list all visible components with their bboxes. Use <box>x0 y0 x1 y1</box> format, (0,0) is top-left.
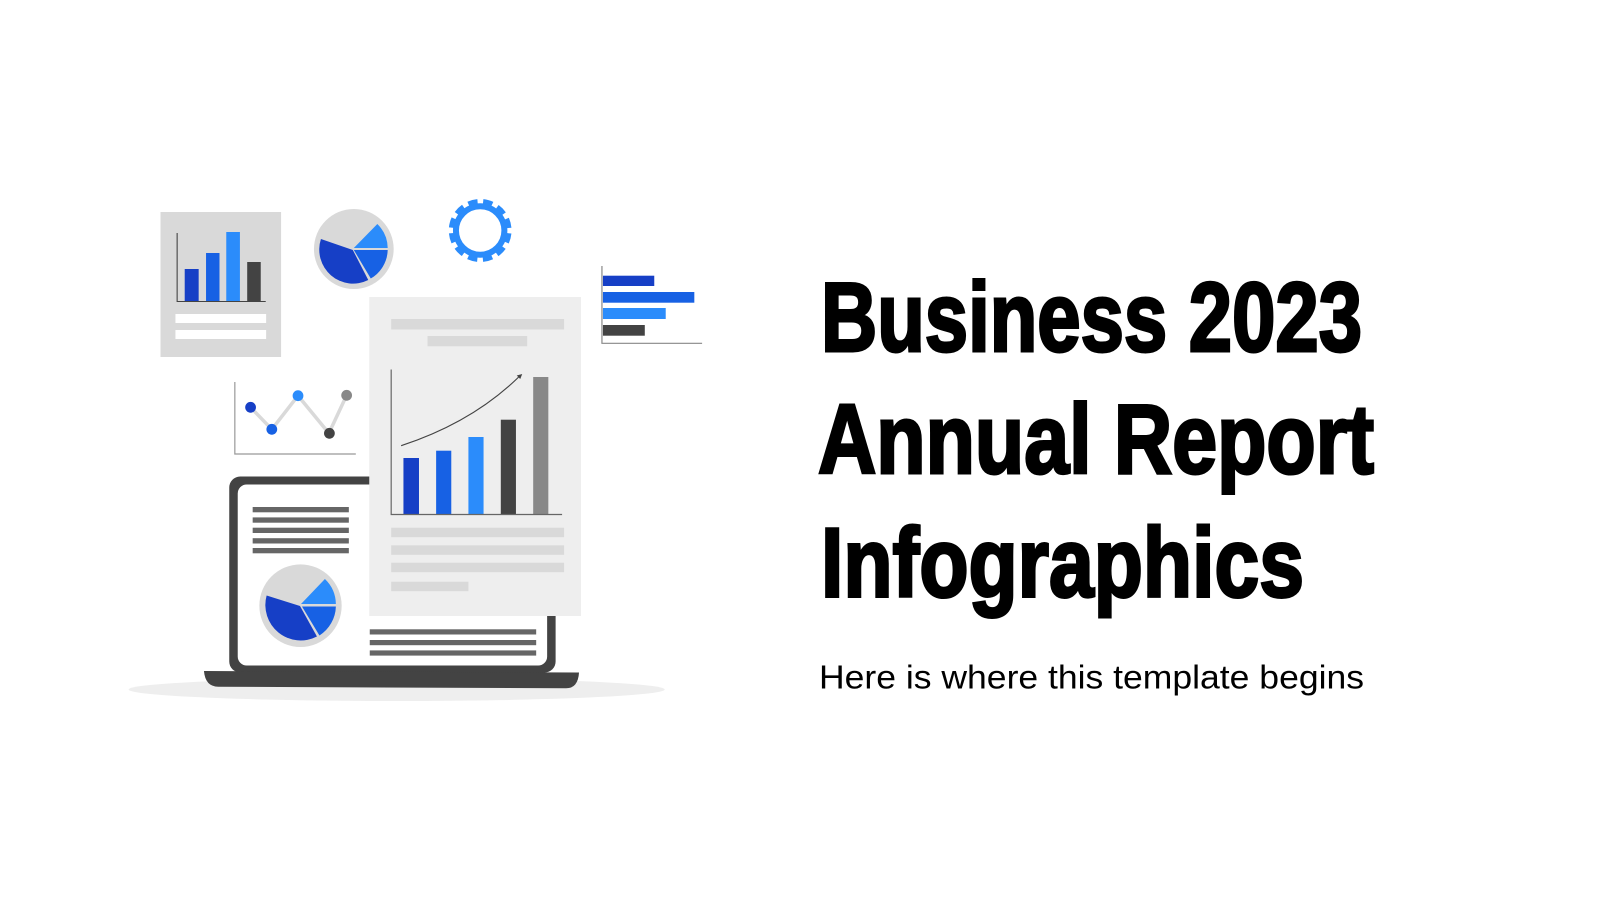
title: Annual Report <box>818 384 1374 494</box>
title: Business 2023 <box>821 262 1362 372</box>
laptop pie chart <box>259 564 342 647</box>
subtitle: Here is where this template begins <box>819 660 1364 696</box>
horizontal bar chart <box>602 266 702 343</box>
panel: report document <box>369 297 581 616</box>
icon: gear <box>451 202 509 260</box>
illustration: business report <box>129 202 702 701</box>
laptop text lines left <box>253 507 349 553</box>
panel: gray report card <box>160 212 281 357</box>
pie chart <box>314 209 394 289</box>
line chart <box>235 382 356 454</box>
icon: laptop <box>204 476 579 688</box>
title <box>818 262 1374 618</box>
arrow: growth curve <box>401 374 522 446</box>
report bar chart <box>391 370 562 514</box>
title: Infographics <box>821 508 1304 618</box>
laptop text lines right <box>370 629 536 656</box>
ground shadow <box>129 678 665 701</box>
